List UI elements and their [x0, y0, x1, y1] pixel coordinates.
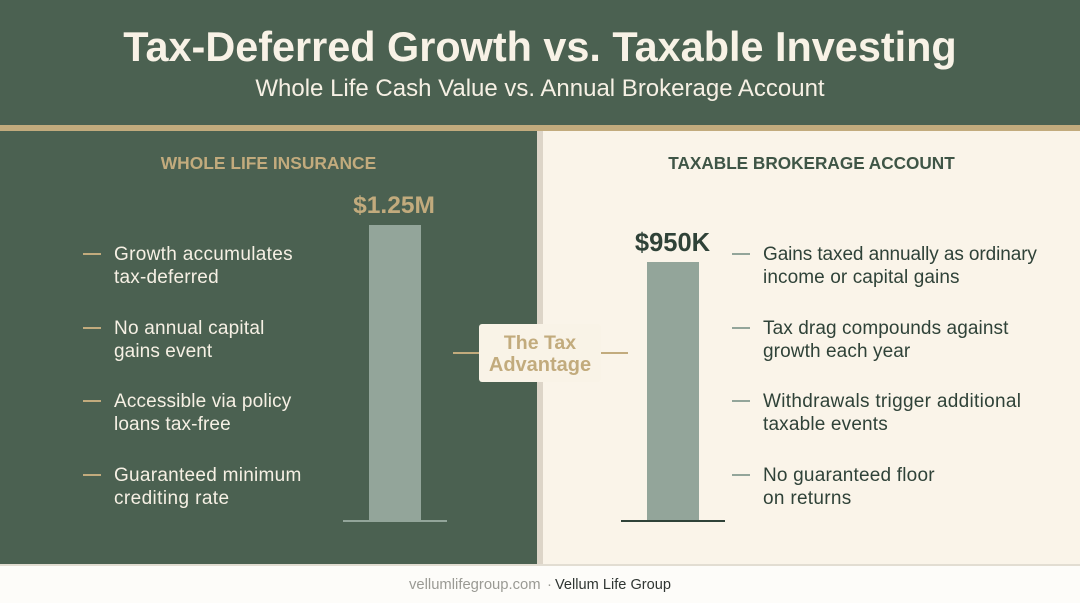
- right bullets: growth each year: [763, 341, 910, 362]
- right bullets: taxable events: [763, 414, 888, 435]
- left bullets: No annual capital: [114, 318, 265, 339]
- callout: the tax advantage: Advantage: [489, 354, 591, 376]
- left bullets: tax-deferred: [114, 267, 219, 288]
- right bullets: Withdrawals trigger additional: [763, 391, 1021, 412]
- footer url: vellumlifegroup.com: [409, 577, 541, 593]
- right heading: TAXABLE BROKERAGE ACCOUNT: [668, 153, 955, 173]
- callout connector left: [453, 352, 480, 354]
- left bullets: Guaranteed minimum: [114, 465, 302, 486]
- center gutter: [537, 131, 543, 565]
- value label: $1.25M: [353, 192, 435, 219]
- footer: [409, 577, 671, 593]
- right bullets: on returns: [763, 488, 852, 509]
- footer brand: Vellum Life Group: [555, 577, 671, 593]
- callout: the tax advantage: The Tax: [504, 332, 576, 354]
- footer dot: ·: [547, 577, 552, 593]
- left bullets: [83, 244, 302, 509]
- gold divider: [0, 125, 1080, 131]
- left bullets: loans tax-free: [114, 414, 231, 435]
- right bullets: income or capital gains: [763, 267, 960, 288]
- right bullets: Gains taxed annually as ordinary: [763, 244, 1037, 265]
- right bullets: Tax drag compounds against: [763, 318, 1009, 339]
- left bullets: crediting rate: [114, 488, 229, 509]
- callout: the tax advantage: [479, 324, 601, 382]
- value label: $950K: [635, 229, 710, 257]
- subtitle: Whole Life Cash Value vs. Annual Brokerage Account: [255, 75, 825, 102]
- panel: taxable brokerage: [543, 131, 1080, 564]
- bar: [647, 262, 699, 521]
- baseline: [621, 520, 725, 522]
- bar: [369, 225, 421, 521]
- right bullets: No guaranteed floor: [763, 465, 935, 486]
- callout connector right: [601, 352, 628, 354]
- left bullets: Growth accumulates: [114, 244, 293, 265]
- header band: [0, 0, 1080, 125]
- left bullets: gains event: [114, 341, 212, 362]
- panel: whole life insurance: [0, 131, 537, 565]
- title: Tax-Deferred Growth vs. Taxable Investing: [123, 24, 957, 70]
- footer rule: [0, 564, 1080, 566]
- left heading: WHOLE LIFE INSURANCE: [161, 153, 376, 173]
- right bar chart: [621, 229, 725, 522]
- baseline: [343, 520, 447, 522]
- left bar chart: [343, 192, 447, 522]
- left bullets: Accessible via policy: [114, 391, 291, 412]
